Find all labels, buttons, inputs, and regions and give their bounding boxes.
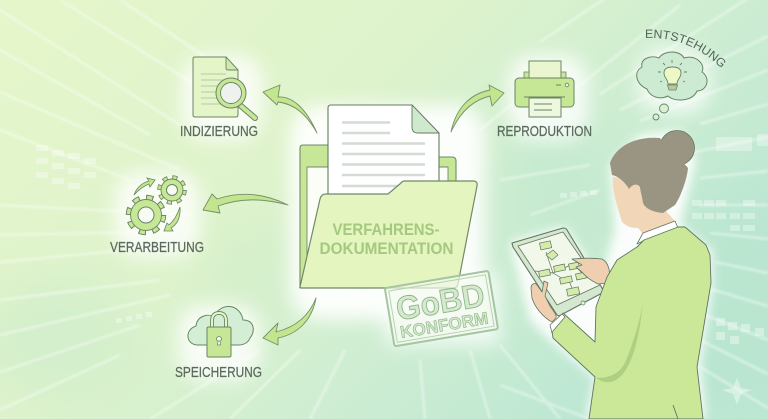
label: Entstehung curved: ENTSTEHUNG xyxy=(646,30,726,67)
folder title: VERFAHRENS- xyxy=(332,220,440,239)
hair bun xyxy=(660,130,694,166)
flowchart on tablet screen xyxy=(535,241,587,296)
label: Speicherung: SPEICHERUNG xyxy=(175,365,262,381)
right hand xyxy=(572,258,610,284)
icon: Indizierung document with magnifier xyxy=(193,57,255,118)
arrow: to Reproduktion xyxy=(451,85,504,132)
light bulb xyxy=(664,67,681,84)
jacket sleeve shadow xyxy=(596,303,643,382)
icon: Verarbeitung gears xyxy=(129,178,184,232)
white glow behind illustrations xyxy=(115,48,710,380)
arrow: to Verarbeitung xyxy=(203,194,288,213)
jacket back vent xyxy=(673,405,678,419)
document page xyxy=(328,105,439,215)
collar xyxy=(637,221,678,244)
arrow: to Speicherung xyxy=(263,298,316,345)
folder front xyxy=(300,181,477,288)
jacket xyxy=(552,227,711,419)
label: Indizierung: INDIZIERUNG xyxy=(180,124,258,140)
label: Verarbeitung: VERARBEITUNG xyxy=(110,240,204,256)
folder back xyxy=(300,145,456,288)
tablet xyxy=(512,228,604,316)
shirt cuff xyxy=(550,314,565,333)
stamp: GoBD konform xyxy=(385,271,498,346)
label: Reproduktion: REPRODUKTION xyxy=(497,124,592,140)
thought bubble with light bulb xyxy=(637,52,707,120)
icon: Speicherung cloud with lock xyxy=(188,306,253,357)
folder with document xyxy=(300,105,477,288)
hair xyxy=(610,138,688,213)
left hand xyxy=(531,281,556,322)
icon: Reproduktion printer xyxy=(515,61,574,117)
background tint patches xyxy=(0,120,768,410)
folder title: DOKUMENTATION xyxy=(320,239,454,258)
stamp: GoBD konform: GoBD xyxy=(393,276,487,327)
background data blocks xyxy=(36,134,768,344)
woman with tablet xyxy=(512,130,711,419)
folder inner sheet xyxy=(307,167,448,288)
neck and face xyxy=(613,177,676,234)
stamp: GoBD konform: KONFORM xyxy=(399,309,490,342)
decorative star xyxy=(722,378,752,405)
folder title xyxy=(320,220,454,258)
arrow: to Indizierung xyxy=(263,85,317,133)
